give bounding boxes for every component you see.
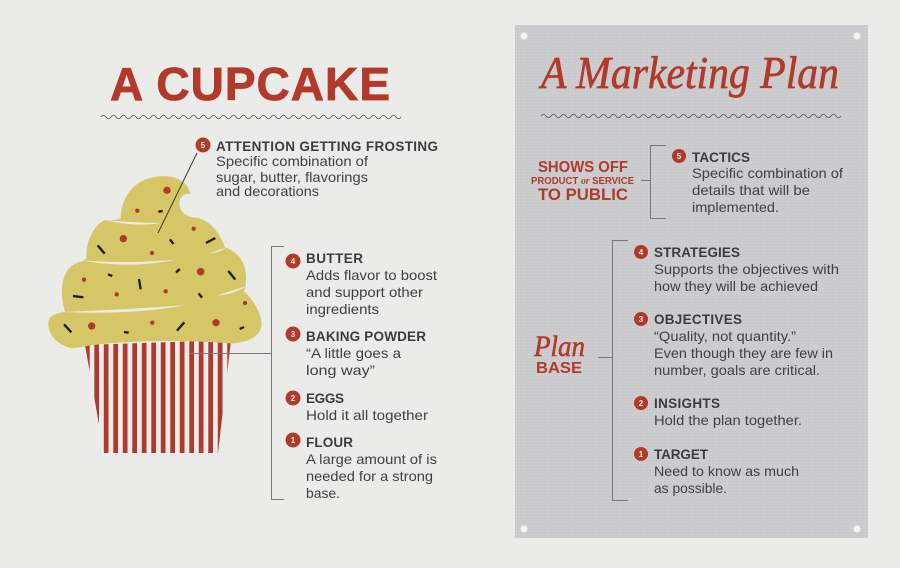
title: a marketing plan: A Marketing Plan [538,47,839,98]
title: a cupcake: A CUPCAKE [110,58,390,110]
callout: target: TARGET [654,447,709,462]
cupcake wrapper stripes [85,340,232,454]
cupcake frosting [48,176,262,348]
callout: baking powder [286,326,426,378]
callout: flour: A large amount of is [306,451,437,467]
callout: objectives: number, goals are critical. [654,362,820,378]
frosting sprinkles: black dashes [64,211,244,333]
callout: eggs: EGGS [306,391,344,406]
label: shows off product or service to public [531,159,634,204]
label: shows off product or service to public: SHOWS OFF [538,159,628,176]
callout: target: Need to know as much [654,463,799,479]
callout: butter: ingredients [306,301,379,317]
callout: flour: needed for a strong [306,468,433,484]
label: plan base: Plan [533,330,585,363]
label: plan base: BASE [536,360,582,377]
callout: butter: Adds flavor to boost [306,267,437,283]
label: shows off product or service to public: PRODUCT or SERVICE [531,175,634,187]
callout: butter: 4 [291,257,296,266]
callout: strategies: STRATEGIES [654,245,740,260]
callout: attention getting frosting: 5 [201,141,206,150]
callout: butter: BUTTER [306,251,363,266]
callout: tactics: implemented. [692,199,779,215]
label: plan base [533,330,585,377]
callout: strategies: Supports the objectives with [654,261,839,277]
callout: insights: Hold the plan together. [654,412,802,428]
wavy divider: cupcake [101,115,401,119]
callout: objectives: “Quality, not quantity.” [654,328,796,344]
callout: attention getting frosting: ATTENTION GETTING FROSTING [216,139,438,154]
callout: baking powder: long way” [306,362,375,378]
callout: insights: 2 [639,399,644,408]
callout: flour: FLOUR [306,435,353,450]
callout: tactics: details that will be [692,182,810,198]
frosting tier gaps [63,220,247,313]
callout: objectives: OBJECTIVES [654,312,742,327]
callout: tactics: TACTICS [692,150,750,165]
callout: flour [286,432,437,501]
callout: attention getting frosting: Specific combination of [216,153,368,169]
bracket: cupcake base [190,246,284,500]
bracket: plan base [598,240,628,500]
callout: strategies [634,245,839,294]
callout: strategies: 4 [639,248,644,257]
callout: target: 1 [639,450,644,459]
callout: flour: 1 [291,436,296,445]
callout: eggs [286,390,428,423]
callout: insights: INSIGHTS [654,396,720,411]
frosting sprinkles: red dots [82,187,247,330]
cupcake illustration [48,176,262,454]
callout: target: as possible. [654,480,727,496]
callout: baking powder: BAKING POWDER [306,329,426,344]
callout: attention getting frosting: sugar, butter, flavorings [216,169,368,185]
callout: target [634,447,799,496]
callout: tactics [672,149,843,215]
callout: tactics: Specific combination of [692,165,843,181]
callout: strategies: how they will be achieved [654,278,818,294]
callout: objectives: Even though they are few in [654,345,833,361]
callout: tactics: 5 [677,152,682,161]
callout: insights [634,396,802,428]
callout: baking powder: “A little goes a [306,345,401,361]
wavy divider: marketing plan [541,114,841,118]
callout: butter: and support other [306,284,423,300]
callout: attention getting frosting: and decorations [216,183,319,199]
callout: baking powder: 3 [291,330,296,339]
callout: objectives [634,312,833,378]
leader line: frosting [158,153,197,233]
callout: butter [286,251,437,317]
callout: attention getting frosting [196,138,438,199]
label: shows off product or service to public: TO PUBLIC [538,185,628,204]
callout: objectives: 3 [639,315,644,324]
panel: marketing plan board [515,25,868,538]
callout: eggs: Hold it all together [306,407,428,423]
bracket: tactics [641,146,666,218]
callout: eggs: 2 [291,394,296,403]
callout: flour: base. [306,485,340,501]
